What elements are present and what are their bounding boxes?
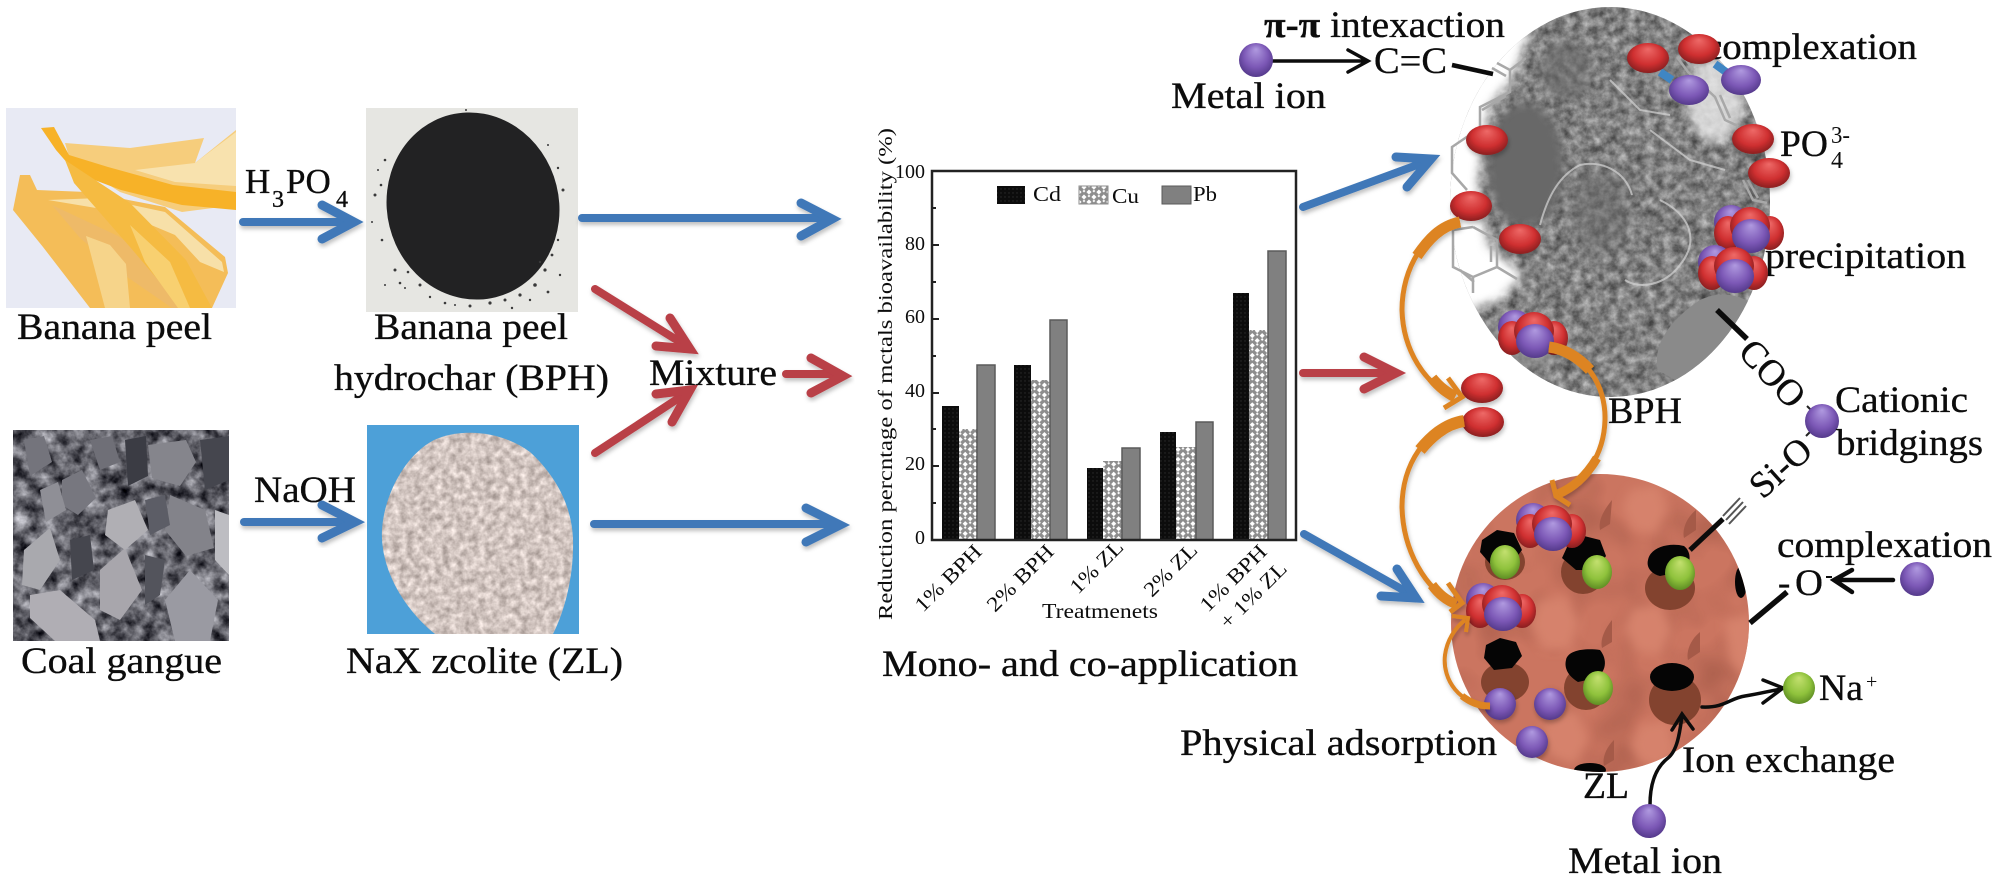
graphene hexagon network — [1452, 55, 1767, 293]
label: phosphate: 3- — [1831, 123, 1850, 149]
label: ZL: ZL — [1583, 766, 1629, 807]
precipitate cluster: right lower — [1698, 245, 1768, 293]
ion exchange arrow releasing Na+ — [1702, 672, 1815, 707]
x axis category labels: + 1% ZL — [1215, 556, 1292, 634]
y axis title: Reduction percntage of mctals bioavailability (%) — [875, 128, 897, 620]
scattered char specks — [371, 109, 564, 309]
y axis tick labels: 20 — [905, 453, 925, 475]
back peel — [65, 130, 236, 212]
y axis tick labels: 100 — [895, 161, 925, 183]
y axis tick labels — [895, 161, 925, 549]
lighter hexagonal facets — [1530, 485, 1760, 768]
label: complexation (BPH): complexation — [1705, 27, 1917, 68]
x axis category labels: 1% ZL — [1065, 535, 1128, 599]
y axis tick labels: 80 — [905, 233, 925, 255]
label: BPH: BPH — [1608, 391, 1682, 432]
BPH particle micrograph — [1440, 7, 1770, 397]
precipitate cluster: ZL upper — [1516, 503, 1586, 551]
reagent label: NaOH: NaOH — [254, 470, 356, 511]
arrow: zeolite to mixture — [595, 390, 690, 453]
reagent label: H3PO4: 4 — [336, 187, 348, 213]
precipitate cluster: ZL lower — [1466, 583, 1536, 631]
pores — [1481, 544, 1701, 725]
x axis title: Treatmenets — [1042, 599, 1158, 623]
label: Na+: Na — [1819, 668, 1863, 709]
label: coal gangue: Coal gangue — [21, 641, 222, 682]
arrow: ZL treatment to ZL mechanism — [1304, 534, 1416, 598]
label: NaX zeolite: NaX zcolite (ZL) — [346, 641, 623, 682]
label: Na+: + — [1866, 671, 1877, 693]
x axis category labels: 1% BPH — [910, 539, 987, 617]
adsorbed metal ions — [1484, 688, 1566, 758]
long strip downward — [65, 160, 212, 308]
arrow: hydrochar to mixture — [595, 289, 690, 349]
orange migration arrows — [1402, 222, 1605, 706]
legend: Pb — [1193, 182, 1217, 206]
label: metal ion top: Metal ion — [1171, 76, 1326, 117]
bars: 2% ZL — [1160, 422, 1213, 540]
bars: 1% BPH + 1% ZL — [1233, 251, 1286, 540]
label: -O- — [1778, 563, 1832, 604]
pale inner flesh — [48, 198, 224, 272]
metal ion with arrow to O — [1834, 562, 1934, 596]
x axis category labels — [910, 535, 1292, 634]
label: -O-: O — [1795, 563, 1823, 604]
chart caption: Mono- and co-application — [882, 644, 1298, 685]
photo: coal gangue — [13, 430, 229, 641]
arrow: BPH phosphate to free ions — [1402, 222, 1462, 408]
label: precipitation: precipitation — [1765, 236, 1966, 277]
white haze on left edge — [1440, 30, 1530, 310]
y axis tick labels: 0 — [915, 527, 925, 549]
metal ion with arrow to C=C — [1239, 43, 1368, 77]
phosphate ions on BPH — [1450, 124, 1790, 254]
label: C=C: C=C — [1374, 41, 1447, 82]
arrow: hydrochar to chart — [582, 203, 832, 236]
bond: ZL to O — [1750, 592, 1787, 623]
left lower peel — [13, 175, 228, 308]
photo: NaX zeolite — [367, 425, 579, 634]
label: cationic bridgings: Cationic — [1835, 380, 1968, 421]
arrow: banana peel to hydrochar — [243, 205, 354, 239]
x axis category labels: 2% ZL — [1139, 538, 1202, 602]
plot frame — [932, 171, 1296, 540]
cationic bridging metal ion — [1805, 404, 1839, 438]
label: cationic bridgings: bridgings — [1836, 423, 1983, 464]
ZL particle — [1451, 474, 1760, 777]
y axis tick labels: 60 — [905, 306, 925, 328]
label: banana peel hydrochar: Banana peel — [374, 307, 568, 348]
x axis category labels: 2% BPH — [982, 539, 1059, 617]
x axis category labels: 1% BPH — [1195, 539, 1272, 617]
bond: ZL to Si triple bond — [1690, 498, 1746, 550]
label: COO-: COO — [1730, 331, 1814, 417]
label: banana peel hydrochar: hydrochar (BPH) — [334, 358, 609, 399]
arrow: BPH treatment to BPH mechanism — [1303, 157, 1431, 207]
reagent label: H3PO4: 3 — [272, 187, 284, 213]
arrow: BPH cluster to ZL cluster — [1549, 347, 1605, 505]
reagent label: H3PO4: H — [245, 162, 270, 201]
bond: C=C to BPH — [1452, 65, 1493, 74]
bond: BPH to COO — [1717, 310, 1747, 339]
legend: Cu — [1112, 184, 1140, 208]
label: phosphate: PO — [1780, 124, 1828, 165]
label: ion exchange: Ion exchange — [1682, 740, 1895, 781]
arrow: coal gangue to zeolite — [244, 505, 355, 538]
bright strip — [41, 127, 236, 210]
exchangeable sodium ions — [1490, 545, 1695, 705]
precipitate cluster: BPH bottom — [1498, 310, 1568, 358]
label: phosphate: 4 — [1831, 148, 1843, 174]
metal ion with arrow into pore — [1632, 714, 1693, 838]
y axis tick labels: 40 — [905, 380, 925, 402]
arrow: mixture to chart — [786, 358, 843, 393]
label: -O-: - — [1778, 563, 1790, 604]
label: cationic bridgings — [1835, 380, 1983, 464]
bar chart: reduction percentage of metal bioavailability — [875, 128, 1296, 634]
label: phosphate — [1780, 123, 1850, 174]
label: complexation (ZL): complexation — [1777, 525, 1992, 566]
reagent label: H3PO4: PO — [286, 162, 331, 201]
complexed metal ions on BPH — [1627, 34, 1761, 105]
label: pi-pi interaction: π-π intexaction — [1264, 5, 1505, 46]
legend: Cd — [1033, 182, 1062, 206]
arrow: zeolite to chart — [594, 508, 840, 542]
bars: 1% ZL — [1087, 448, 1140, 540]
precipitate cluster: right upper — [1714, 205, 1784, 253]
bright crystalline strands — [1540, 80, 1725, 285]
shared phosphate ions — [1461, 373, 1504, 437]
arrow: co-application to shared ions — [1303, 357, 1396, 389]
legend — [997, 182, 1217, 208]
label: Si-O: Si-O — [1741, 429, 1821, 507]
photo: banana peel hydrochar — [366, 94, 579, 318]
photo: banana peel — [6, 108, 236, 308]
label: banana peel: Banana peel — [17, 307, 212, 348]
label: physical adsorption: Physical adsorption — [1180, 723, 1497, 764]
arrow: free ions to ZL — [1402, 421, 1464, 612]
label: mixture: Mixture — [649, 353, 777, 394]
label: banana peel hydrochar — [334, 307, 609, 399]
bars: 2% BPH — [1014, 320, 1067, 540]
bars: 1% BPH — [942, 365, 995, 540]
arrow: ZL cluster to physical adsorption — [1445, 616, 1490, 706]
